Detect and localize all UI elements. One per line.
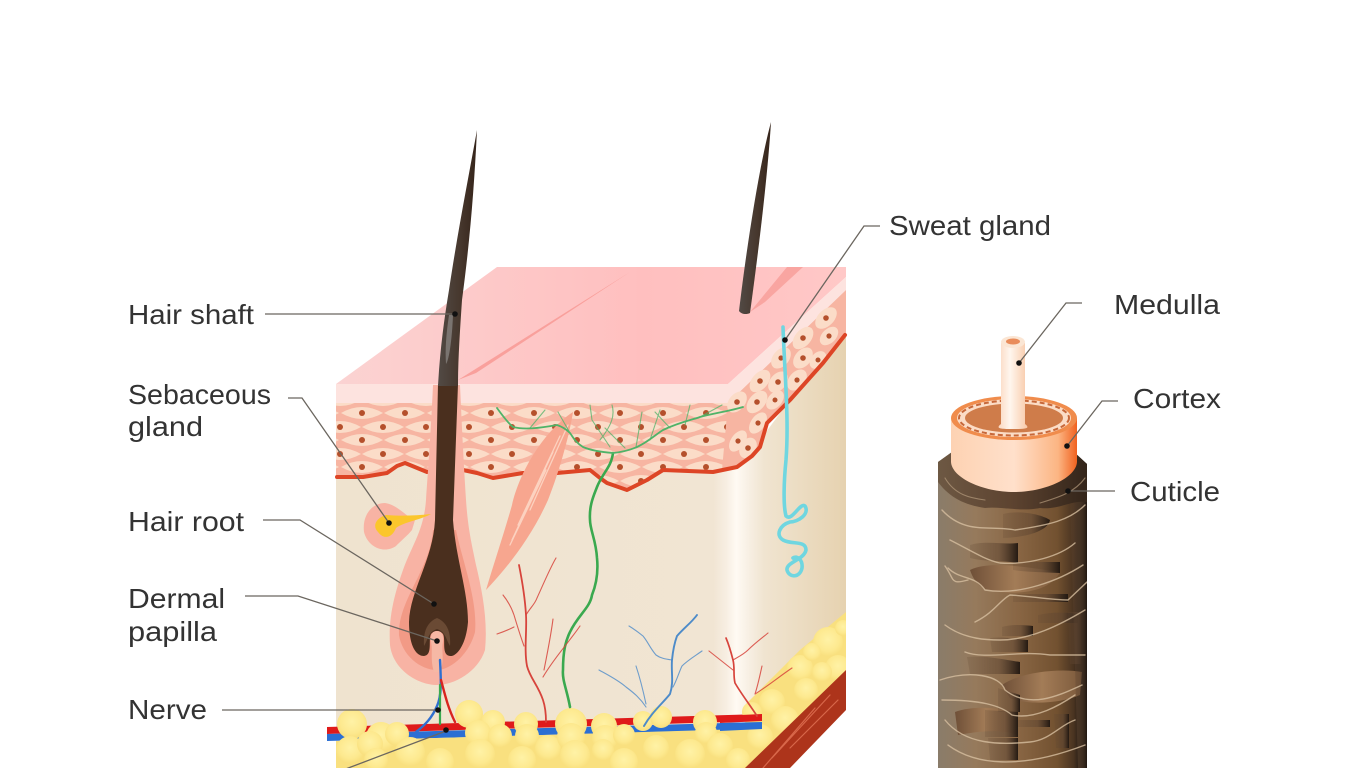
- nerve branches: [497, 405, 743, 707]
- inner root sheath: [399, 530, 475, 670]
- infographic canvas: [129, 122, 1220, 768]
- vessel end right: [720, 714, 762, 731]
- label: Sebaceous gland: Sebaceous: [128, 379, 271, 410]
- medulla top: [1001, 336, 1025, 348]
- label: Medulla: [1016, 289, 1220, 366]
- skin top surface: [336, 267, 846, 384]
- panel: hair strand cross-section: [938, 336, 1087, 768]
- label: Sebaceous gland: [128, 379, 392, 526]
- subcutaneous fat layer: [336, 612, 851, 768]
- muscle fibres: [763, 695, 838, 768]
- label: Sebaceous gland: gland: [128, 411, 203, 442]
- label: Cuticle: [1065, 476, 1220, 507]
- leader: blood vessels: [343, 727, 449, 768]
- epidermis cells side: [722, 290, 846, 470]
- hair shaft: [438, 130, 477, 386]
- label: Nerve: Nerve: [128, 694, 207, 725]
- label: Hair shaft: [128, 299, 458, 330]
- epidermis red border: [337, 335, 845, 490]
- cortex inner dashed ring: [957, 399, 1071, 437]
- capillaries blue: [599, 615, 702, 726]
- arrector pili muscle: [486, 412, 573, 590]
- label: Dermal papilla: papilla: [128, 616, 217, 647]
- epidermis cells front: [336, 403, 768, 490]
- sebaceous gland: [364, 503, 431, 550]
- cuticle lighter lobes: [955, 565, 1082, 735]
- vessels and nerve at follicle base: [416, 660, 455, 732]
- cortex side: [951, 418, 1077, 492]
- label: Medulla: Medulla: [1114, 289, 1220, 320]
- label: Hair root: Hair root: [128, 506, 244, 537]
- cuticle dark scale patches: [967, 500, 1087, 768]
- label: Cuticle: Cuticle: [1130, 476, 1220, 507]
- blood vessel stripes: [327, 714, 762, 741]
- label: Cortex: Cortex: [1133, 383, 1221, 414]
- cuticle pale scale lines: [940, 505, 1087, 762]
- label: Dermal papilla: [128, 583, 440, 647]
- pale stratum corneum band: [336, 277, 846, 403]
- label: Dermal papilla: Dermal: [128, 583, 225, 614]
- label: Sweat gland: Sweat gland: [889, 210, 1051, 241]
- muscle layer corner: [745, 670, 846, 768]
- panel: skin cross-section block: [327, 122, 851, 768]
- label: Nerve: [128, 694, 441, 725]
- hair bulb: [409, 384, 468, 656]
- shaft highlight: [446, 315, 453, 364]
- dermis layer: [336, 325, 846, 768]
- left hair follicle: [390, 130, 486, 685]
- cortex top ellipse: [951, 396, 1077, 440]
- capillaries red: [497, 558, 792, 722]
- outer root sheath: [390, 385, 486, 685]
- textured cuticle rim: [938, 452, 1087, 509]
- right hair: [739, 122, 771, 314]
- label: Hair root: [128, 506, 437, 607]
- label: Hair shaft: Hair shaft: [128, 299, 254, 330]
- dermal papilla: [431, 631, 443, 672]
- skin crease: [458, 272, 630, 380]
- medulla core: [1006, 338, 1020, 344]
- label: Cortex: [1064, 383, 1221, 449]
- medulla tube: [999, 343, 1027, 429]
- hair matrix lighter tone: [424, 618, 450, 646]
- rim pale crack lines: [945, 478, 1085, 503]
- cuticle outer layer: [938, 452, 1087, 768]
- sweat gland: [779, 327, 806, 576]
- label: Sweat gland: [782, 210, 1051, 343]
- skin crease right: [750, 267, 803, 312]
